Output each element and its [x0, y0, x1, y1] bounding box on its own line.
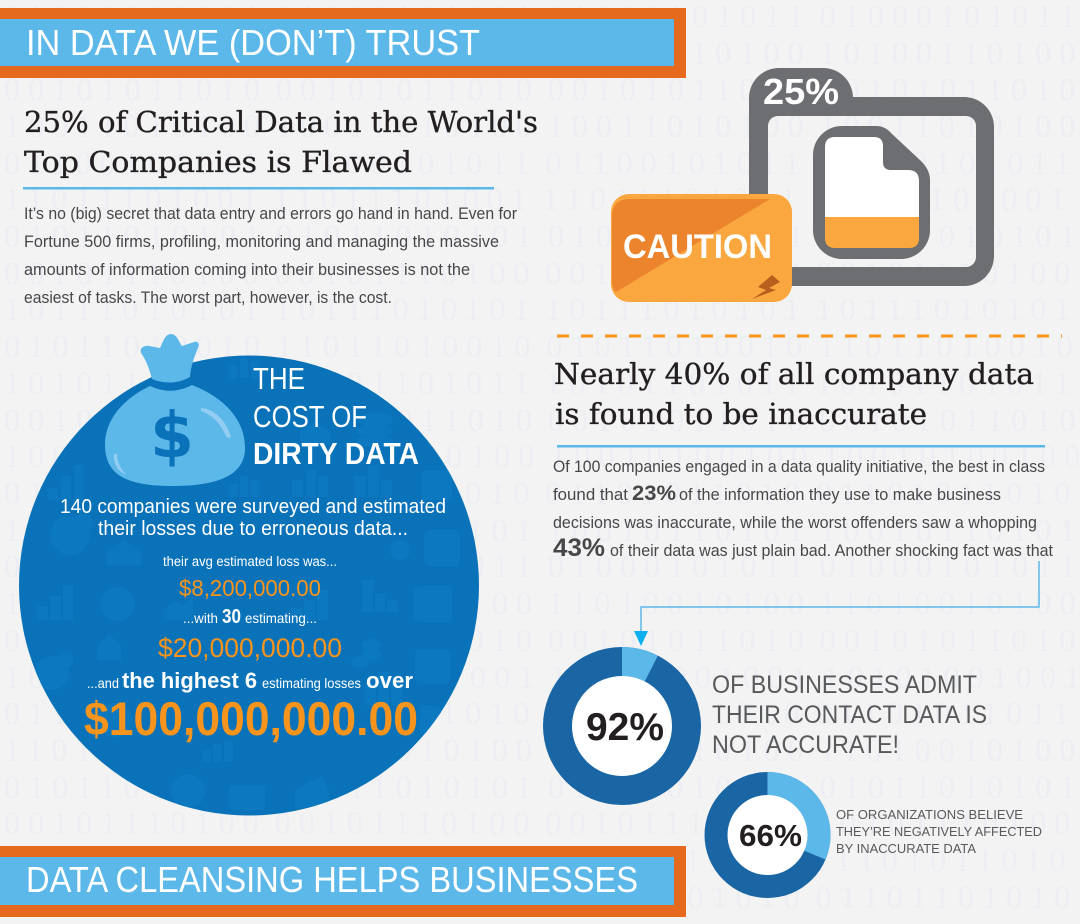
text block: data quality initiative: found that [553, 485, 628, 504]
footer banner [0, 846, 686, 917]
text: 01101101010 01101101010 01101101010 01101101010 [4, 880, 1078, 916]
text: 10101001001 10101001001 10101001001 10101001001 [4, 660, 1080, 696]
text block: data quality initiative: of the information they use to make business [679, 485, 1001, 504]
donut chart: 92 percent: 92% [586, 706, 664, 749]
text block: data quality initiative: 43% [553, 534, 605, 562]
text: 00101011010 00101011010 00101011010 00101011010 [4, 403, 1080, 439]
text block: data quality initiative: of their data was just plain bad. Another shocking fact was that [610, 541, 1053, 560]
text block: intro: It’s no (big) secret that data entry and errors go hand in hand. Even for [24, 204, 517, 223]
text: 10101101011 10101101011 10101101011 10101101011 [4, 366, 1078, 402]
icon: caution sign: CAUTION [623, 228, 772, 266]
text: 01011010101 01011010101 01011010101 01011010101 [4, 219, 1080, 255]
text: organizations claim: OF ORGANIZATIONS BELIEVE [836, 808, 1023, 822]
text: 01011010010 11011010010 01011010010 11011010010 [4, 329, 1080, 365]
text: highest six: the highest 6 [122, 668, 257, 693]
text block: intro [24, 204, 517, 307]
text: average loss: their avg estimated loss was... [163, 554, 337, 569]
heading: the cost of dirty data: COST OF [253, 399, 367, 434]
text: 10100110101 10100110101 10100110100 10100110100 [4, 36, 1080, 72]
donut chart: 66 percent: 66% [739, 818, 802, 853]
text: 01000101011 01000101011 01000101011 01000101011 [4, 549, 1080, 585]
heading: the cost of dirty data: DIRTY DATA [253, 436, 419, 471]
text: 01011010101 01011010101 01011010101 01011010101 [4, 770, 1080, 806]
text: average loss [163, 554, 337, 601]
donut chart: 66 percent [704, 772, 831, 898]
heading: inaccurate data [554, 357, 1045, 448]
text: 00101011010 00101011010 00101011010 00101011010 [4, 623, 1080, 659]
text: thirty estimating: estimating... [245, 610, 317, 626]
text: thirty estimating [158, 606, 342, 663]
text: 00101011010 00101011010 00101011010 00101011010 [4, 72, 1080, 108]
text: survey intro: their losses due to erroneous data... [98, 518, 408, 540]
text: 11101011010 11101011010 11101011010 11101011010 [4, 843, 1073, 879]
icon: money bag [105, 334, 245, 486]
text: survey intro [60, 496, 446, 540]
heading: inaccurate data: is found to be inaccurate [555, 397, 927, 431]
donut chart: 92 percent [543, 647, 701, 805]
text: organizations claim: THEY’RE NEGATIVELY AFFECTED [836, 825, 1042, 839]
heading: flawed data: Top Companies is Flawed [24, 145, 412, 179]
text: contact data claim [712, 671, 987, 759]
heading: flawed data: 25% of Critical Data in the World's [24, 105, 538, 139]
text block: intro: easiest of tasks. The worst part, however, is the cost. [24, 288, 392, 307]
title banner [0, 8, 686, 78]
text block: intro: Fortune 500 firms, profiling, monitoring and managing the massive [24, 232, 499, 251]
text: contact data claim: NOT ACCURATE! [712, 731, 899, 759]
text: highest six [84, 668, 418, 745]
text: contact data claim: THEIR CONTACT DATA IS [712, 701, 987, 729]
text block: data quality initiative: 23% [632, 482, 676, 505]
text block: data quality initiative: decisions was inaccurate, while the worst offenders saw a whopping [553, 513, 1037, 532]
text: highest six: $100,000,000.00 [84, 692, 418, 745]
text: organizations claim: BY INACCURATE DATA [836, 842, 977, 856]
text: 00101110100 00101110100 00101110100 00101110100 [4, 806, 1078, 842]
heading: the cost of dirty data: THE [253, 361, 305, 396]
text: thirty estimating: ...with [183, 610, 218, 626]
text block: data quality initiative [553, 457, 1053, 562]
icon: caution sign [611, 194, 792, 302]
arrow: connector to 92 percent chart [634, 561, 1039, 646]
text: thirty estimating: 30 [222, 606, 241, 628]
icon: money bag: $ [150, 399, 194, 472]
heading: inaccurate data: Nearly 40% of all company data [554, 357, 1034, 391]
text: survey intro: 140 companies were surveyed and estimated [60, 496, 446, 518]
text: 10010100100 10010100100 10010100100 10010100100 [4, 439, 1080, 475]
text: highest six: ...and [87, 675, 119, 691]
text block: intro: amounts of information coming into their businesses is not the [24, 260, 470, 279]
icon: folder with 25 percent document [749, 68, 994, 286]
text: 11011101001 11011101001 11011101001 11011101001 [4, 182, 1073, 218]
text: highest six: over [366, 668, 413, 693]
text: thirty estimating: $20,000,000.00 [158, 633, 342, 663]
text: 01101011010 01101011010 01101011010 01101011010 [4, 476, 1078, 512]
panel: cost of dirty data [19, 334, 479, 816]
text: average loss: $8,200,000.00 [179, 575, 321, 601]
heading: flawed data [23, 105, 538, 190]
text block: data quality initiative: Of 100 companies engaged in a data quality initiative, the best in class [553, 457, 1045, 476]
text: 01101011010 01101011010 01101011010 01101011011 [4, 696, 1077, 732]
title: IN DATA WE (DON’T) TRUST [26, 22, 480, 63]
text: contact data claim: OF BUSINESSES ADMIT [712, 671, 977, 699]
text: organizations claim [836, 808, 1042, 856]
text: highest six: estimating losses [262, 675, 361, 691]
icon: folder with 25 percent document: 25% [763, 71, 839, 112]
heading: the cost of dirty data [253, 361, 419, 471]
text: 11010010100 11010010100 11010010100 11010010100 [4, 586, 1080, 622]
footer heading: DATA CLEANSING HELPS BUSINESSES [26, 859, 638, 900]
text: 01100101011 01100101011 01100101011 01100101011 [4, 146, 1078, 182]
text: 00101110100 00101110100 00101110100 00101110100 [4, 256, 1078, 292]
text: 10010110101 10010110101 10010110101 10010110101 [4, 513, 1080, 549]
text: 10111010101 10111010101 10111010101 10111010101 [4, 292, 1078, 328]
text: 11010010100 11010010100 11010010100 11010010100 [4, 733, 1080, 769]
text: 10011010100 10011010100 10011010100 10011010100 [4, 109, 1080, 145]
